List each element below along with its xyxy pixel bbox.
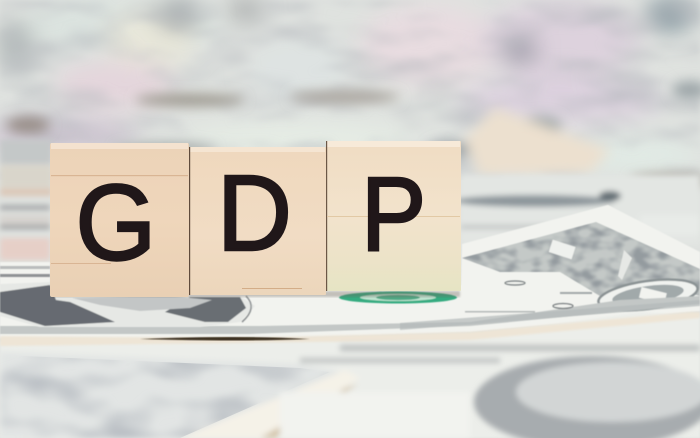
wooden block G <box>50 143 189 297</box>
letter G: G <box>76 163 156 283</box>
shadow under blocks <box>52 291 460 297</box>
letter P: P <box>361 156 426 273</box>
shadow under the front bill <box>140 337 310 340</box>
foreground dollar bill <box>0 205 700 339</box>
wooden block P <box>326 141 461 291</box>
blurred portrait oval <box>474 356 700 438</box>
green treasury seal <box>339 292 457 304</box>
foreground blurred bills <box>0 312 700 438</box>
wooden block D <box>189 147 326 295</box>
letter D: D <box>217 153 292 273</box>
mid-distance bill with soft print <box>0 140 700 260</box>
engraving: right side vignette <box>0 220 700 334</box>
portrait circle left <box>0 266 255 327</box>
